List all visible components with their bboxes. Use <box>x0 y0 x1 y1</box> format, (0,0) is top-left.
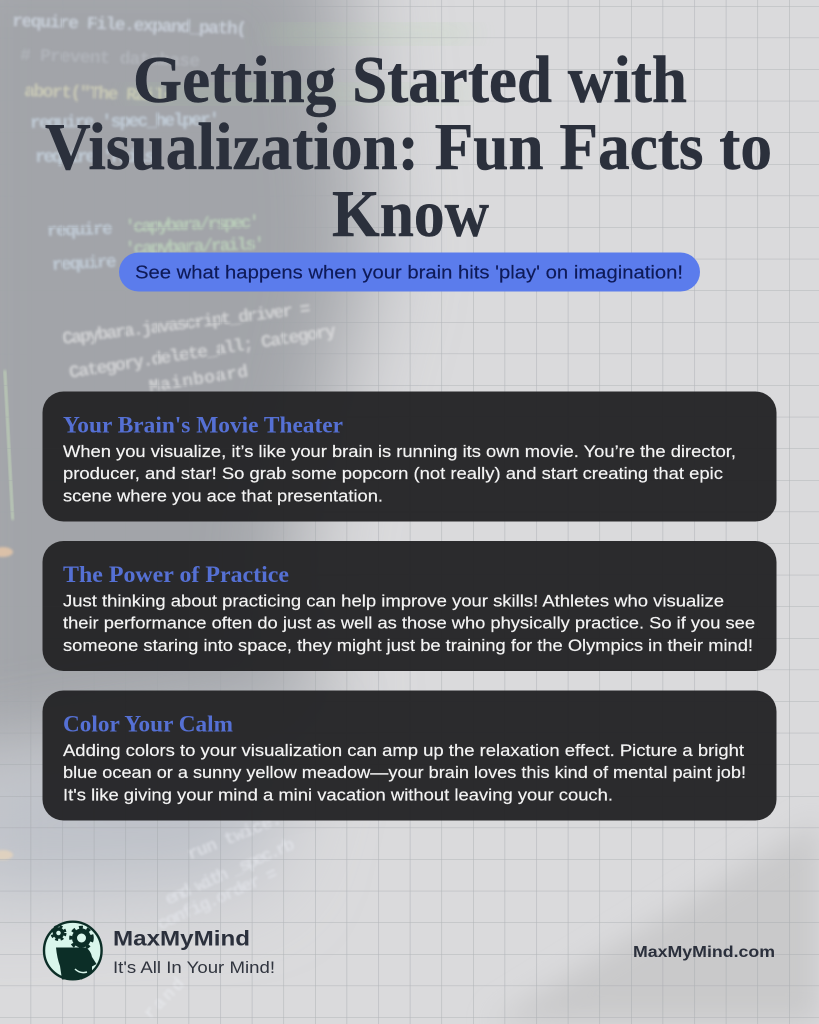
background: blurred code photograph with grid: Category.delete_all; Category <box>68 322 338 384</box>
brand name and tagline <box>113 926 275 977</box>
heading: The Power of Practice: The Power of Practice <box>63 562 289 588</box>
background: blurred code photograph with grid: end with _spec.rb <box>162 835 298 910</box>
title: Visualization: Fun Facts to <box>45 110 772 184</box>
subtitle pill <box>119 252 700 292</box>
icon: MaxMyMind head and gears logo <box>44 922 102 980</box>
background: blurred code photograph with grid: config.order = <box>154 864 281 935</box>
background: blurred code photograph with grid: # Prevent database <box>20 46 200 72</box>
background: blurred code photograph with grid: require 'spec_helper' <box>30 111 220 134</box>
heading: Color Your Calm: Color Your Calm <box>63 712 233 738</box>
panel: The Power of Practice <box>42 541 776 671</box>
background: blurred code photograph with grid: require File.expand_path( <box>12 12 247 40</box>
background: blurred code photograph with grid: 'capybara/rspec' <box>125 213 260 238</box>
heading: Your Brain's Movie Theater: Your Brain's Movie Theater <box>63 412 343 438</box>
website url: MaxMyMind.com <box>633 944 775 961</box>
body text: movie theater: When you visualize, it’s like your brain is running its own movie. You’re the director, <box>63 442 736 461</box>
background: blurred code photograph with grid: require 'rails <box>35 148 155 168</box>
body text: practice <box>63 592 755 655</box>
background: blurred code photograph with grid: require <box>51 253 117 276</box>
body text: practice: their performance often do just as well as those who physically practice. So if you see <box>63 614 755 632</box>
background: blurred code photograph with grid: abort("The Rails <box>24 82 174 107</box>
body text: color: blue ocean or a sunny yellow meadow—your brain loves this kind of mental paint job! <box>63 763 746 782</box>
title <box>45 43 772 251</box>
title: Know <box>332 177 490 251</box>
background: blurred code photograph with grid: Mainboard <box>148 363 250 398</box>
panel: Your Brain's Movie Theater <box>42 392 776 522</box>
background: blurred code photograph with grid: run twice. <box>185 810 285 866</box>
title: Getting Started with <box>133 43 687 117</box>
body text: color <box>63 741 746 804</box>
background: blurred code photograph with grid: rand <box>140 975 190 1024</box>
brand name and tagline: It's All In Your Mind! <box>113 959 275 977</box>
background: blurred code photograph with grid: Capybara.javascript_driver = <box>61 300 312 350</box>
body text: movie theater: producer, and star! So grab some popcorn (not really) and start creating that epic <box>63 464 724 483</box>
body text: practice: Just thinking about practicing can help improve your skills! Athletes who visualize <box>63 592 724 610</box>
body text: color: It's like giving your mind a mini vacation without leaving your couch. <box>63 786 613 804</box>
brand name and tagline: MaxMyMind <box>113 926 250 950</box>
body text: movie theater <box>63 442 736 506</box>
background: blurred code photograph with grid: 'capybara/rails' <box>125 235 265 260</box>
subtitle pill: See what happens when your brain hits 'play' on imagination! <box>135 262 683 282</box>
background: blurred code photograph with grid: require <box>47 220 113 242</box>
body text: movie theater: scene where you ace that presentation. <box>63 486 383 506</box>
panel: Color Your Calm <box>42 690 776 820</box>
body text: color: Adding colors to your visualization can amp up the relaxation effect. Picture a bright <box>63 741 744 760</box>
body text: practice: someone staring into space, they might just be training for the Olympics in their mind! <box>63 636 753 655</box>
